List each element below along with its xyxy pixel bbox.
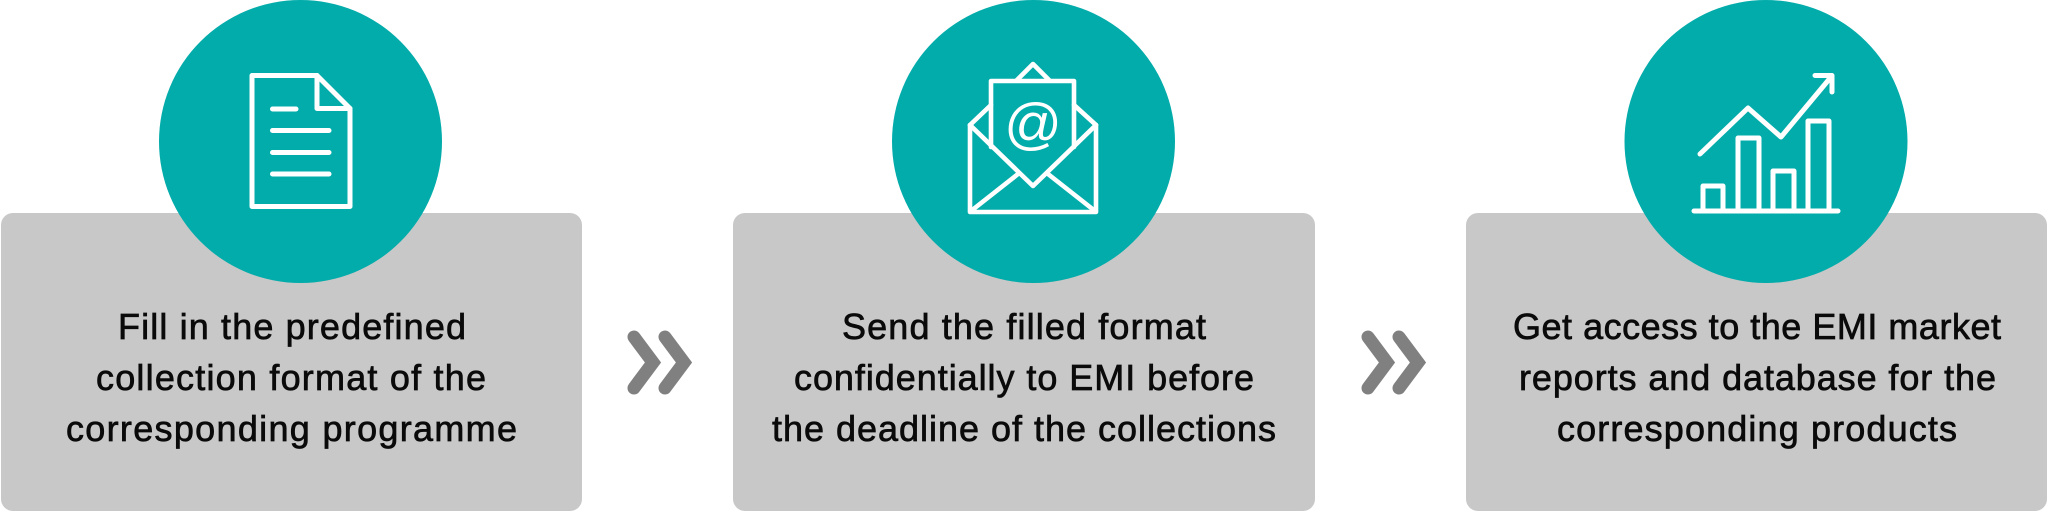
panel: step 2: [733, 0, 1315, 511]
icon: open envelope with at sign: [970, 64, 1096, 212]
arrow: step 1 to step 2: [634, 337, 684, 388]
icon: open envelope with at sign: @: [1004, 92, 1062, 156]
icon: rising bar chart: [1694, 76, 1838, 211]
step 2 text: confidentially to EMI before: [794, 357, 1254, 398]
step 3 card background: [1466, 213, 2047, 511]
step 3 text: corresponding products: [1557, 408, 1957, 449]
step 1 text: corresponding programme: [66, 408, 517, 449]
icon: document: [252, 76, 350, 206]
step 2 text: the deadline of the collections: [772, 408, 1276, 449]
step 1 text: collection format of the: [96, 357, 486, 398]
step 1 text: Fill in the predefined: [118, 306, 466, 347]
step 3 text: reports and database for the: [1519, 357, 1996, 398]
step 1 circle: [159, 0, 442, 283]
panel: step 3: [1466, 0, 2047, 511]
step 3 text: Get access to the EMI market: [1513, 306, 2001, 347]
arrow: step 2 to step 3: [1368, 337, 1418, 388]
step 2 text: Send the filled format: [842, 306, 1206, 347]
step 2 card background: [733, 213, 1315, 511]
step 1 text: [66, 306, 517, 449]
step 3 circle: [1624, 0, 1908, 283]
panel: step 1: [1, 0, 582, 511]
step 1 card background: [1, 213, 582, 511]
step 2 circle: [892, 0, 1175, 283]
step 3 text: [1513, 306, 2001, 449]
step 2 text: [772, 306, 1276, 449]
